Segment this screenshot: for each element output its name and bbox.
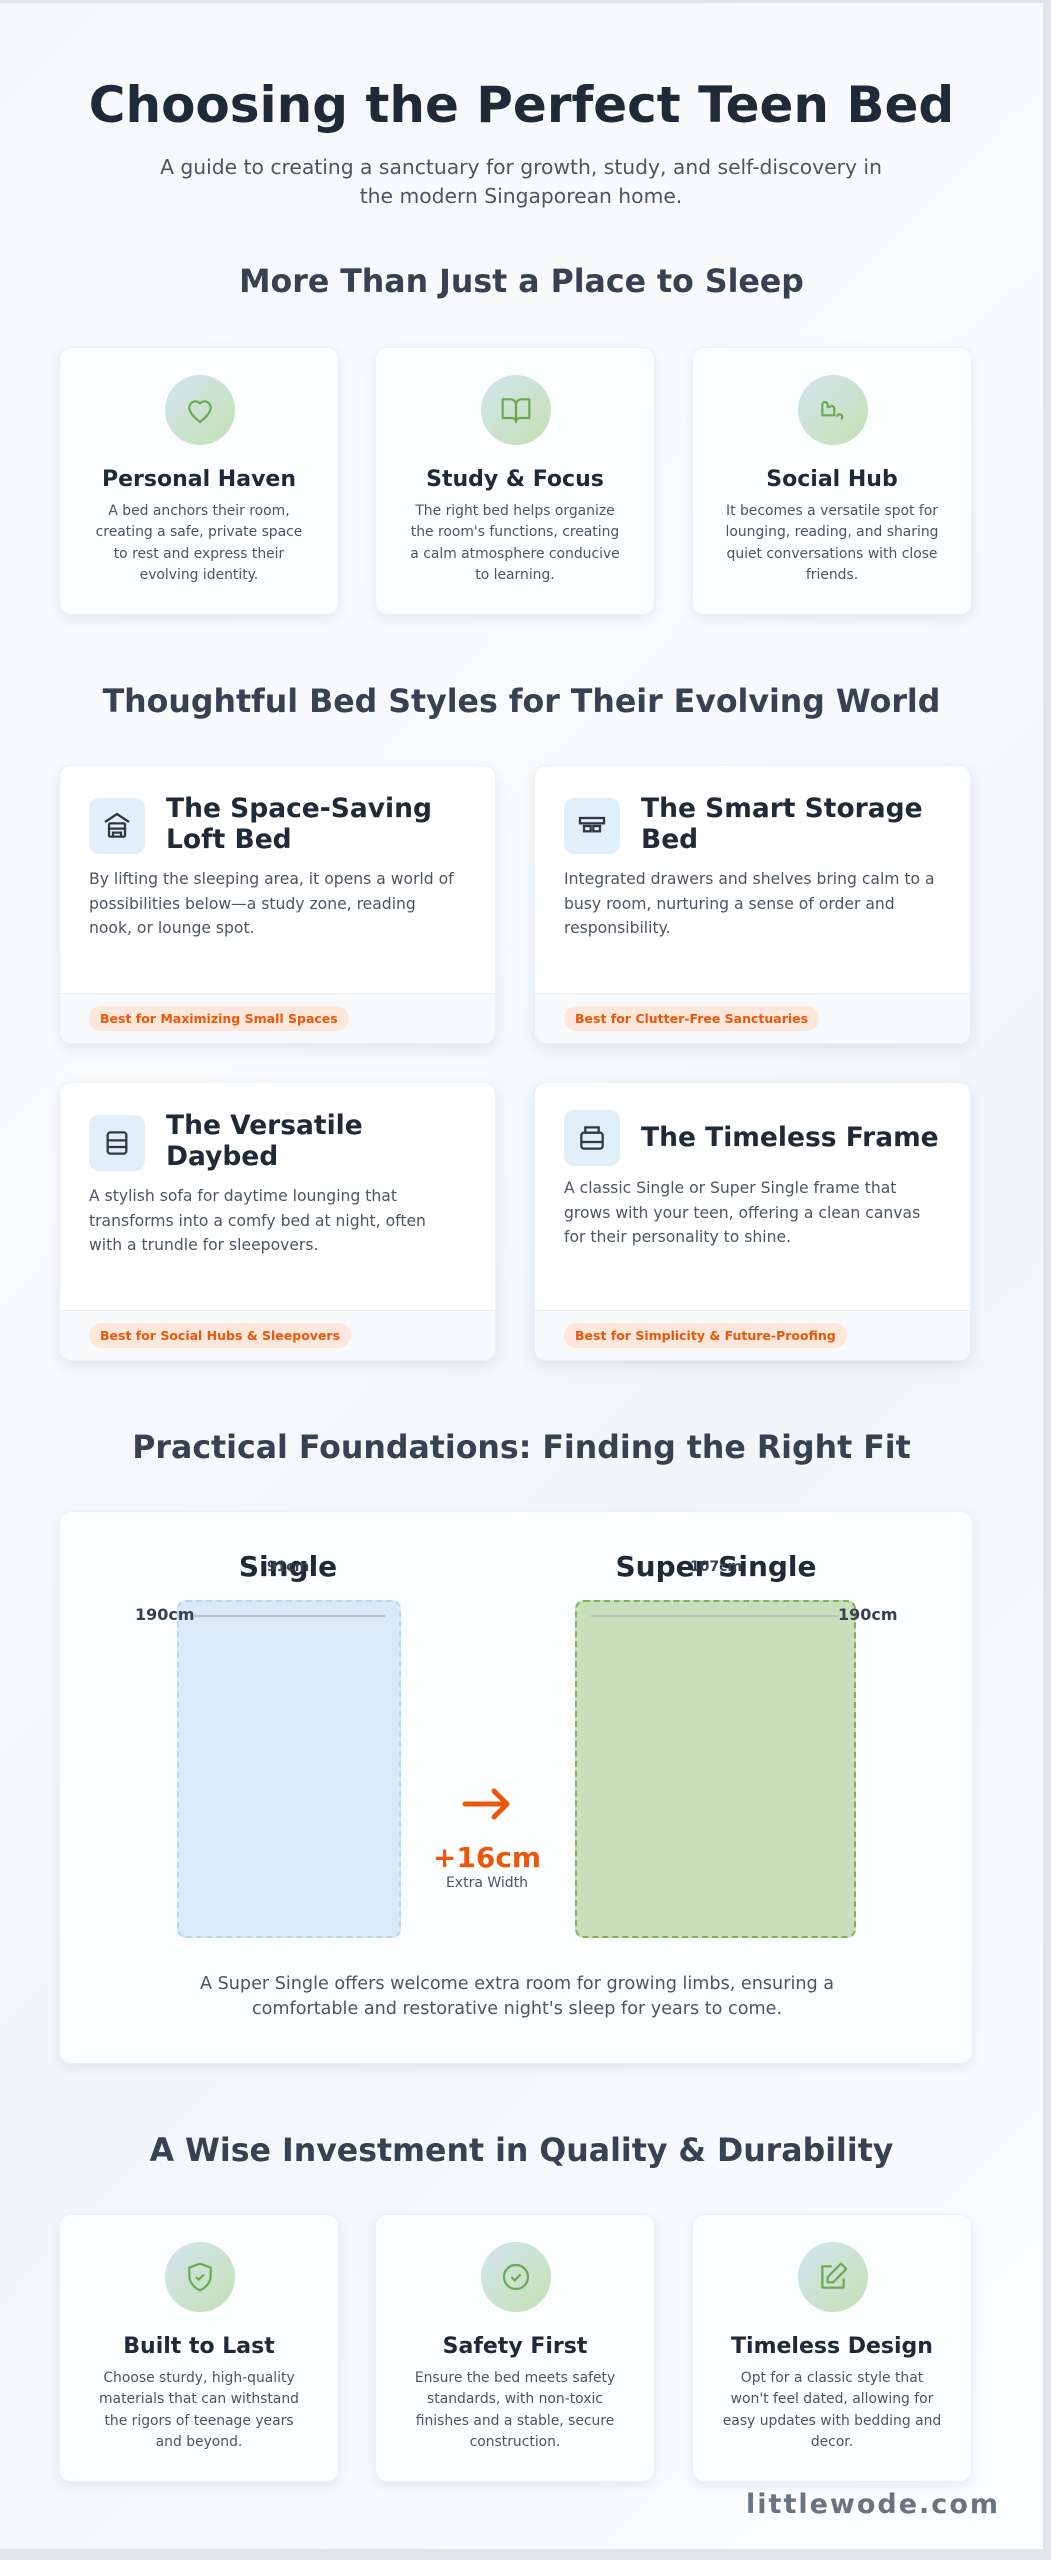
icon: hands: [798, 375, 868, 445]
title: Choosing the Perfect Teen Bed: [89, 76, 954, 134]
card text: Choose sturdy, high-quality materials that can withstand the rigors of teenage years and beyond.: [99, 2370, 299, 2450]
card text: decor.: [811, 2434, 853, 2450]
footer badge: Best for Maximizing Small Spaces: [100, 1011, 338, 1026]
single length line: [194, 1615, 385, 1617]
icon: heart: [165, 375, 235, 445]
card: timeless design: [692, 2214, 972, 2482]
card title: Personal Haven: [102, 467, 296, 492]
style card: daybed: [59, 1082, 496, 1361]
panel: size comparison: [59, 1511, 973, 2064]
style card: timeless frame: [534, 1082, 971, 1361]
subtitle: A guide to creating a sanctuary for growth, study, and self-discovery in the modern Singaporean home.: [160, 155, 882, 208]
description: By lifting the sleeping area, it opens a world of possibilities below—a study zone, reading nook, or lounge spot.: [89, 870, 454, 937]
title: The Timeless Frame: [641, 1122, 939, 1153]
card text: It becomes a versatile spot for lounging, reading, and sharing quiet conversations with close friends.: [726, 503, 938, 583]
footer badge: Best for Clutter-Free Sanctuaries: [575, 1011, 808, 1026]
heading: wise investment: A Wise Investment in Quality & Durability: [150, 2133, 893, 2169]
label: super single: Super Single: [615, 1550, 817, 1583]
card: personal haven: [59, 347, 339, 615]
style card: loft bed: [59, 765, 496, 1044]
super single length label: 190cm: [838, 1605, 898, 1624]
card text: The right bed helps organize the room's functions, creating a calm atmosphere conducive to learning.: [410, 503, 620, 583]
title: The Versatile Daybed: [166, 1110, 363, 1172]
card title: Study & Focus: [426, 467, 604, 492]
heading: more than just a place to sleep: More Than Just a Place to Sleep: [239, 264, 804, 300]
card: social hub: [692, 347, 972, 615]
card title: Safety First: [443, 2334, 587, 2359]
icon: check circle: [481, 2242, 551, 2312]
card text: [723, 2370, 941, 2450]
description: A classic Single or Super Single frame that grows with your teen, offering a clean canvas for their personality to shine.: [564, 1179, 920, 1246]
card: study & focus: [375, 347, 655, 615]
card text: Opt for a classic style that: [741, 2370, 923, 2386]
card text: Ensure the bed meets safety standards, with non-toxic finishes and a stable, secure construction.: [415, 2370, 615, 2450]
card title: Social Hub: [766, 467, 898, 492]
style card: storage bed: [534, 765, 971, 1044]
footer badge: [535, 993, 970, 1043]
single bed rectangle: [177, 1600, 401, 1938]
heading: practical foundations: Practical Foundations: Finding the Right Fit: [132, 1430, 911, 1466]
single length label: 190cm: [135, 1605, 195, 1624]
icon: shield: [165, 2242, 235, 2312]
card: safety first: [375, 2214, 655, 2482]
card text: easy updates with bedding and: [723, 2413, 941, 2429]
watermark: littlewode.com: [746, 2489, 1000, 2520]
extra width label: Extra Width: [446, 1875, 528, 1891]
label: super single width: 107cm: [690, 1559, 742, 1575]
card title: Built to Last: [123, 2334, 275, 2359]
title: The Space-Saving Loft Bed: [166, 793, 432, 855]
card title: Timeless Design: [731, 2334, 933, 2359]
card text: won't feel dated, allowing for: [731, 2391, 933, 2407]
icon: storage: [564, 798, 620, 854]
label: single width: 91cm: [267, 1559, 309, 1575]
card text: A bed anchors their room, creating a safe, private space to rest and express their evolving identity.: [96, 503, 302, 583]
icon: frame: [564, 1110, 620, 1166]
description: Integrated drawers and shelves bring calm to a busy room, nurturing a sense of order and responsibility.: [564, 870, 935, 937]
super single rectangle: [575, 1600, 856, 1938]
footer badge: Best for Social Hubs & Sleepovers: [100, 1328, 340, 1343]
super single length line: [591, 1615, 839, 1617]
icon: pencil: [798, 2242, 868, 2312]
footer badge: [535, 1310, 970, 1360]
caption: A Super Single offers welcome extra room for growing limbs, ensuring a comfortable and restorative night's sleep for years to come.: [200, 1974, 834, 2019]
description: A stylish sofa for daytime lounging that transforms into a comfy bed at night, often with a trundle for sleepovers.: [89, 1187, 426, 1254]
icon: book: [481, 375, 551, 445]
footer badge: Best for Simplicity & Future-Proofing: [575, 1328, 836, 1343]
footer badge: [60, 1310, 495, 1360]
title: The Smart Storage Bed: [641, 793, 923, 855]
extra width value: +16cm: [433, 1841, 541, 1874]
icon: daybed: [89, 1115, 145, 1171]
card: built to last: [59, 2214, 339, 2482]
footer badge: [60, 993, 495, 1043]
arrow: [462, 1788, 510, 1820]
heading: bed styles: Thoughtful Bed Styles for Their Evolving World: [103, 684, 940, 720]
icon: loft: [89, 798, 145, 854]
label: single: Single: [239, 1550, 337, 1583]
